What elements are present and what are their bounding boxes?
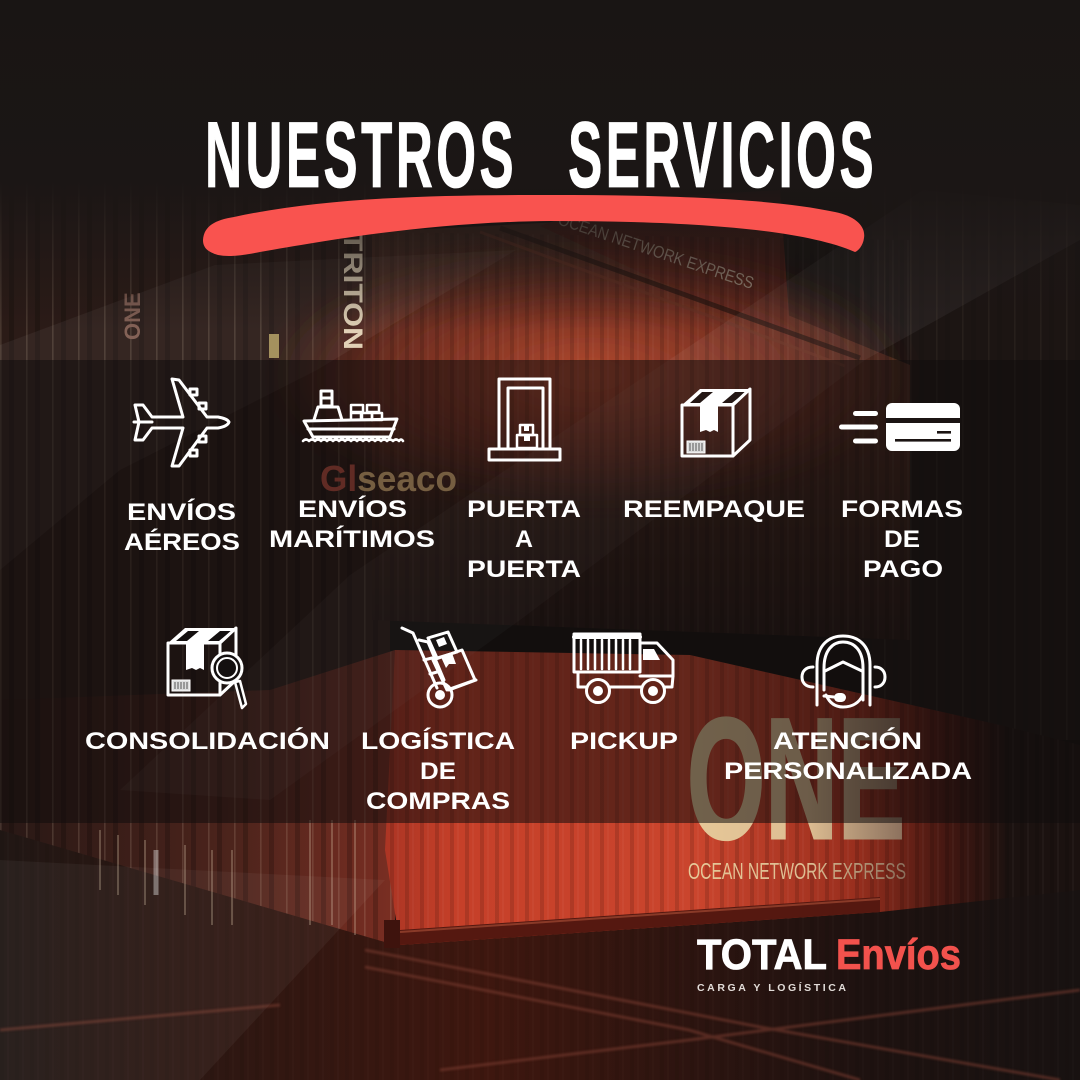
service: envíos aéreos bbox=[124, 379, 240, 556]
label: formas de pago: FORMAS bbox=[841, 496, 963, 523]
icon: parcel with magnifier bbox=[168, 628, 246, 708]
container door bars bbox=[100, 820, 355, 935]
left container lettering: ONE bbox=[120, 292, 145, 340]
road markings bbox=[0, 950, 1080, 1080]
logo: Total Envíos bbox=[697, 931, 961, 994]
container lettering ONE: ONE bbox=[687, 683, 905, 875]
container lettering Triton: TRITON bbox=[338, 232, 368, 350]
left container stack bbox=[0, 180, 390, 710]
label: logística de compras: DE bbox=[420, 758, 456, 785]
logo: Total Envíos: Envíos bbox=[836, 931, 961, 979]
lower left floor and second container bbox=[0, 650, 1080, 1080]
label: logística de compras bbox=[361, 727, 515, 815]
icon: headset agent bbox=[802, 636, 885, 707]
label: envíos marítimos: ENVÍOS bbox=[298, 495, 407, 523]
service: atención personalizada bbox=[724, 636, 972, 785]
logo: Total Envíos: CARGA Y LOGÍSTICA bbox=[697, 981, 846, 994]
label: envíos aéreos bbox=[124, 498, 240, 556]
label: envíos aéreos: ENVÍOS bbox=[127, 498, 236, 526]
label: envíos marítimos bbox=[269, 495, 435, 553]
service: logística de compras bbox=[361, 628, 515, 815]
icon: airplane bbox=[134, 379, 229, 466]
service: puerta a puerta bbox=[467, 379, 581, 583]
label: logística de compras: LOGÍSTICA bbox=[361, 727, 515, 755]
icon: credit card in motion bbox=[839, 403, 960, 451]
red container bbox=[384, 650, 1080, 948]
title: NUESTROS bbox=[205, 102, 517, 207]
service: envíos marítimos bbox=[269, 391, 435, 553]
label: atención personalizada: ATENCIÓN bbox=[773, 727, 922, 755]
label: envíos aéreos: AÉREOS bbox=[124, 528, 240, 556]
red brush underline bbox=[203, 195, 864, 256]
label: atención personalizada: PERSONALIZADA bbox=[724, 758, 972, 785]
label: logística de compras: COMPRAS bbox=[366, 788, 510, 815]
label: puerta a puerta: PUERTA bbox=[467, 496, 581, 523]
upper centre container bbox=[270, 190, 910, 640]
label: atención personalizada bbox=[724, 727, 972, 785]
top dark fade bbox=[0, 0, 1080, 330]
icon: parcel box bbox=[682, 389, 750, 456]
label: consolidación: CONSOLIDACIÓN bbox=[85, 727, 330, 755]
label: formas de pago: DE bbox=[884, 526, 920, 553]
dark band behind icons bbox=[0, 360, 1080, 823]
upper container lettering: OCEAN NETWORK EXPRESS bbox=[556, 210, 756, 293]
label: reempaque: REEMPAQUE bbox=[623, 496, 805, 523]
icon: hand truck with boxes bbox=[402, 628, 476, 707]
service: reempaque bbox=[623, 389, 805, 523]
yellow door placard bbox=[269, 334, 279, 358]
label: formas de pago bbox=[841, 496, 963, 583]
container lettering Ocean Network Express: OCEAN NETWORK EXPRESS bbox=[688, 858, 906, 884]
label: puerta a puerta: PUERTA bbox=[467, 556, 581, 583]
icon: truck bbox=[574, 634, 673, 702]
icon: door with parcel bbox=[489, 379, 560, 460]
service: consolidación bbox=[85, 628, 330, 755]
container lettering Seaco: Glseaco bbox=[320, 458, 457, 499]
service: formas de pago bbox=[839, 403, 963, 583]
icon: cargo ship bbox=[303, 391, 403, 441]
label: puerta a puerta bbox=[467, 496, 581, 583]
right container wall bbox=[860, 180, 1080, 740]
label: pickup: PICKUP bbox=[570, 728, 678, 755]
label: envíos marítimos: MARÍTIMOS bbox=[269, 525, 435, 553]
logo: Total Envíos: TOTAL bbox=[697, 931, 827, 979]
label: formas de pago: PAGO bbox=[863, 556, 943, 583]
label: puerta a puerta: A bbox=[515, 526, 533, 553]
service: pickup bbox=[570, 634, 678, 755]
